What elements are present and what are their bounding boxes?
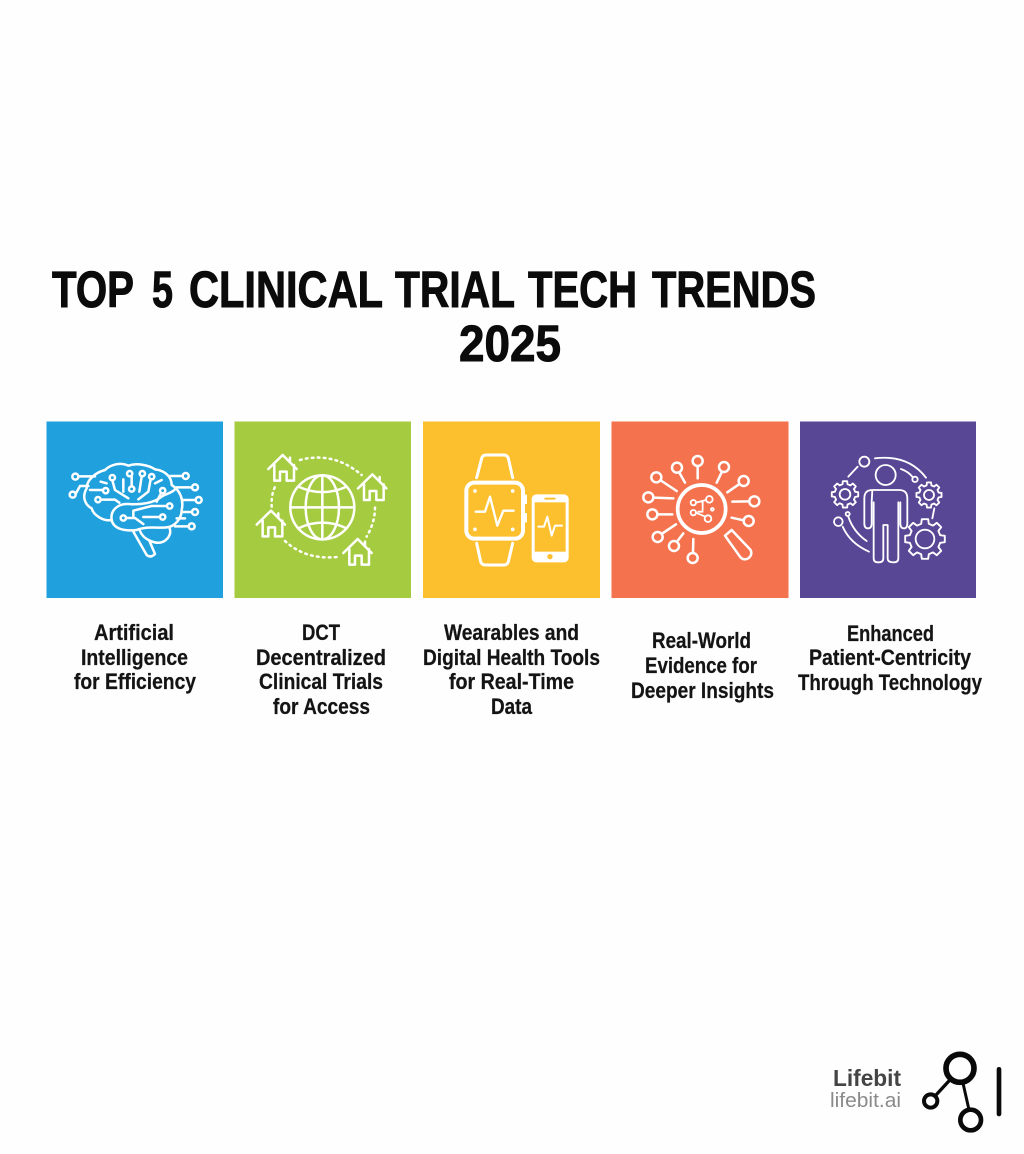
panel: wearables: [423, 422, 600, 719]
title: TECH: [528, 261, 637, 318]
title: CLINICAL: [189, 261, 383, 318]
label: decentralized clinical trials: [256, 620, 386, 719]
icon: person with gears: [832, 457, 945, 562]
label: decentralized clinical trials: for Access: [273, 694, 370, 719]
logo: Lifebit: lifebit.ai: [830, 1090, 901, 1112]
title: TRIAL: [395, 261, 515, 318]
label: patient-centricity: Patient-Centricity: [809, 645, 972, 670]
label: decentralized clinical trials: Clinical Trials: [259, 669, 383, 694]
label: patient-centricity: Enhanced: [847, 621, 934, 646]
title: [52, 261, 816, 372]
label: artificial intelligence: Intelligence: [81, 645, 188, 670]
label: patient-centricity: [798, 621, 983, 695]
label: real-world evidence: Real-World: [652, 628, 751, 653]
panel: patient-centricity: [798, 422, 983, 695]
icon: smartwatch and phone: [466, 455, 569, 565]
icon: magnifier with data nodes: [643, 456, 759, 563]
label: real-world evidence: Evidence for: [645, 653, 757, 678]
label: wearables: for Real-Time: [449, 669, 574, 694]
logo: Lifebit: Lifebit: [833, 1065, 901, 1091]
label: wearables: Digital Health Tools: [423, 645, 600, 670]
label: wearables: Wearables and: [444, 620, 579, 645]
label: real-world evidence: [631, 628, 774, 703]
title: TOP: [52, 261, 134, 318]
label: patient-centricity: Through Technology: [798, 670, 983, 695]
label: real-world evidence: Deeper Insights: [631, 678, 774, 703]
icon: network mark: [924, 1054, 999, 1130]
panel: artificial intelligence: [46, 422, 223, 694]
label: artificial intelligence: for Efficiency: [74, 669, 197, 694]
title: TRENDS: [652, 261, 816, 318]
title: 5: [152, 261, 173, 318]
panel: real-world evidence: [612, 422, 788, 703]
label: wearables: [423, 620, 600, 719]
icon: globe with homes: [257, 455, 386, 565]
label: decentralized clinical trials: Decentralized: [256, 645, 386, 670]
icon: circuit brain: [70, 464, 202, 556]
label: decentralized clinical trials: DCT: [302, 620, 340, 645]
title: 2025: [459, 315, 561, 372]
label: artificial intelligence: Artificial: [94, 620, 174, 645]
label: wearables: Data: [491, 694, 533, 719]
logo: Lifebit: [830, 1054, 999, 1130]
panel: decentralized clinical trials: [234, 422, 411, 719]
label: artificial intelligence: [74, 620, 197, 694]
